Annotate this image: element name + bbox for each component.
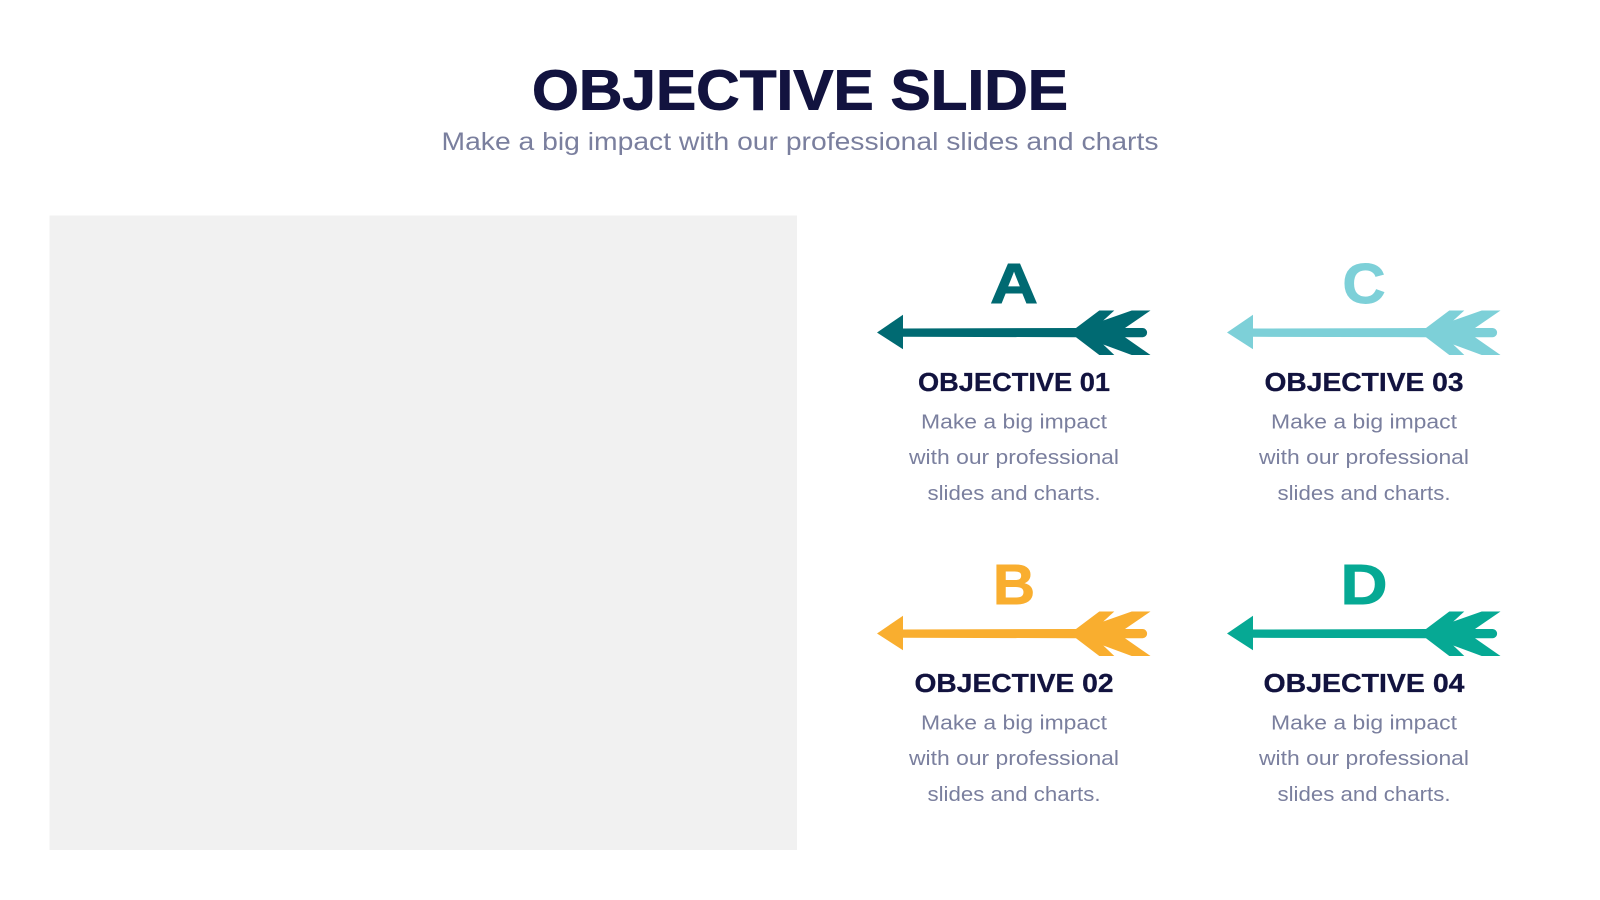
letter A: A <box>990 252 1038 316</box>
body text 03: with our professional <box>1258 446 1469 469</box>
arrow C <box>1227 310 1500 355</box>
body text 01 <box>908 410 1119 505</box>
arrow A <box>877 310 1150 355</box>
body text 03 <box>1258 410 1469 505</box>
body text 01: with our professional <box>908 446 1119 469</box>
body text 01: Make a big impact <box>921 410 1107 433</box>
body text 01: slides and charts. <box>928 482 1100 505</box>
heading objective 04: OBJECTIVE 04 <box>1264 668 1465 698</box>
heading objective 02: OBJECTIVE 02 <box>914 668 1114 698</box>
body text 04: Make a big impact <box>1271 711 1457 734</box>
body text 04: with our professional <box>1258 747 1469 770</box>
body text 03: Make a big impact <box>1271 410 1457 433</box>
body text 04: slides and charts. <box>1278 783 1450 806</box>
body text 02: with our professional <box>908 747 1119 770</box>
objective C <box>1227 252 1500 505</box>
body text 04 <box>1258 711 1469 806</box>
arrow B <box>877 612 1150 656</box>
title: OBJECTIVE SLIDE <box>532 58 1068 122</box>
arrow D <box>1227 612 1500 656</box>
body text 02: slides and charts. <box>928 783 1100 806</box>
image placeholder panel <box>50 216 797 850</box>
objective D <box>1227 553 1500 806</box>
letter B: B <box>993 553 1035 617</box>
objective A <box>877 252 1150 505</box>
subtitle: Make a big impact with our professional slides and charts <box>442 128 1158 156</box>
body text 03: slides and charts. <box>1278 482 1450 505</box>
letter D: D <box>1340 553 1388 617</box>
heading objective 03: OBJECTIVE 03 <box>1264 367 1464 397</box>
objective B <box>877 553 1150 806</box>
body text 02 <box>908 711 1119 806</box>
heading objective 01: OBJECTIVE 01 <box>918 367 1110 397</box>
letter C: C <box>1342 252 1386 316</box>
body text 02: Make a big impact <box>921 711 1107 734</box>
